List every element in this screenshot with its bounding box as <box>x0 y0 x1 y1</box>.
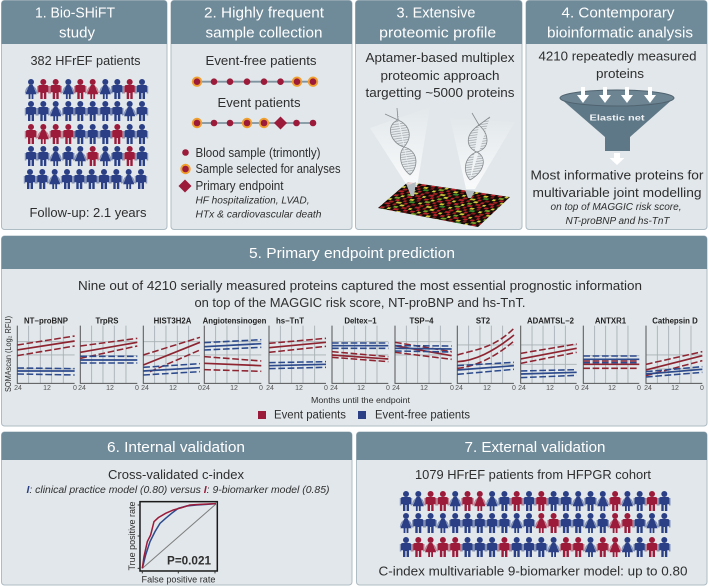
chart: Deltex-1: 0 <box>386 385 390 392</box>
panel: 3. Extensive proteomic profile <box>356 0 522 230</box>
panel 4 heading <box>547 4 693 42</box>
panel 3 heading: 3. Extensive <box>396 4 476 22</box>
icon: DNA helix 1 <box>385 108 416 175</box>
aptamer description: proteomic approach <box>380 69 500 83</box>
panel 1 heading: study <box>59 24 95 42</box>
panel 7 header band <box>356 432 707 460</box>
event label: Event patients <box>218 96 300 110</box>
chart: NT-proBNP: 0 <box>73 385 77 392</box>
chart: Cathepsin D: 0 <box>700 385 704 392</box>
model comparison: I: clinical practice model (0.80) versus I: 9-biomarker model (0.85) <box>26 485 330 496</box>
panel: 5. Primary endpoint prediction <box>2 236 707 426</box>
note on models <box>550 202 682 227</box>
panel 7 background <box>356 432 707 585</box>
chart: TrpRS: TrpRS <box>96 316 118 326</box>
chart: Cathepsin D: 24 <box>644 385 652 392</box>
chart: ADAMTSL-2: 0 <box>575 385 579 392</box>
c-index result: C-index multivariable 9-biomarker model: up to 0.80 <box>378 564 688 578</box>
panel 5 background <box>2 236 707 426</box>
panel 7 heading: 7. External validation <box>464 439 606 456</box>
output description: multivariable joint modelling <box>532 186 702 200</box>
protein count: 4210 repeatedly measured <box>538 50 697 64</box>
output description: Most informative proteins for <box>530 168 704 182</box>
panel 1 heading <box>35 4 115 42</box>
chart: ADAMTSL-2 <box>518 316 579 392</box>
light beams <box>370 107 515 189</box>
event-free timeline <box>192 76 318 87</box>
panel 2 header band <box>171 0 352 44</box>
chart: TSP-4: 24 <box>392 385 400 392</box>
legend: HF hospitalization, LVAD, <box>196 196 310 206</box>
probes <box>407 182 475 198</box>
chart: TrpRS <box>78 316 139 392</box>
panel: 7. External validation <box>356 432 707 585</box>
panel 6 heading: 6. Internal validation <box>107 439 245 456</box>
label: Elastic net: Elastic net <box>590 114 645 122</box>
panel 1 background <box>2 0 167 230</box>
panel: 2. Highly frequent sample collection <box>171 0 352 230</box>
panel: 6. Internal validation <box>2 432 352 585</box>
chart: hs-TnT <box>266 316 328 392</box>
chart: TSP-4: TSP−4 <box>409 316 434 326</box>
panel: 1. Bio-SHiFT study <box>2 0 167 230</box>
x axis title: Months until the endpoint <box>311 396 411 405</box>
chart: NT-proBNP <box>14 316 77 392</box>
legend: event patients: Event patients <box>274 410 346 422</box>
chart: ANTXR1: 0 <box>637 385 641 392</box>
legend: HTx & cardiovascular death <box>196 210 322 220</box>
chart: Angiotensinogen: 24 <box>202 385 210 392</box>
chart: Cathepsin D: Cathepsin D <box>652 316 698 326</box>
chart: Angiotensinogen: 12 <box>230 385 238 392</box>
chart: NT-proBNP: 12 <box>43 385 51 392</box>
output description <box>530 168 704 200</box>
panel 6 background <box>2 432 352 585</box>
chart: HIST3H2A: 0 <box>198 385 202 392</box>
summary text: on top of the MAGGIC risk score, NT-proBNP and hs-TnT. <box>194 296 526 310</box>
arrow out of funnel <box>610 153 624 165</box>
chart: Deltex-1 <box>330 316 390 392</box>
chart: NT-proBNP: 24 <box>14 385 22 392</box>
aptamer description <box>366 51 515 100</box>
legend: Blood sample (trimontly) <box>196 146 320 160</box>
chart: hs-TnT: 12 <box>295 385 303 392</box>
chart: ST2 <box>455 316 516 392</box>
c-index title: Cross-validated c-index <box>108 468 245 482</box>
chart: ST2: 24 <box>455 385 463 392</box>
panel 2 heading <box>204 4 325 42</box>
chart: Angiotensinogen: Angiotensinogen <box>203 316 267 326</box>
panel 4 heading: 4. Contemporary <box>562 4 675 22</box>
panel 1 heading: 1. Bio-SHiFT <box>35 4 115 22</box>
chart: Deltex-1: 12 <box>357 385 365 392</box>
chart: Deltex-1: 24 <box>330 385 338 392</box>
chart: ANTXR1: 24 <box>581 385 589 392</box>
event-free label: Event-free patients <box>206 54 316 68</box>
panel 5 header band <box>2 236 707 269</box>
note on models: on top of MAGGIC risk score, <box>550 202 682 213</box>
icon: DNA helix 2 <box>465 113 490 180</box>
chart: ANTXR1: 12 <box>608 385 616 392</box>
chart: HIST3H2A: 24 <box>141 385 149 392</box>
x axis label: False positive rate <box>142 574 216 584</box>
panel 2 heading: 2. Highly frequent <box>204 4 325 22</box>
panel 5 heading: 5. Primary endpoint prediction <box>249 245 455 262</box>
summary text <box>78 279 642 310</box>
chart: ADAMTSL-2: ADAMTSL−2 <box>527 316 575 326</box>
legend <box>178 146 340 220</box>
chart: ANTXR1 <box>581 316 641 392</box>
chart: Angiotensinogen: 0 <box>259 385 263 392</box>
legend: Primary endpoint <box>196 179 284 193</box>
protein count <box>538 50 697 81</box>
chart: ADAMTSL-2: 12 <box>546 385 554 392</box>
microarray chip <box>378 182 510 227</box>
panel 4 header band <box>526 0 707 44</box>
chart: TSP-4 <box>392 316 454 392</box>
chart: hs-TnT: 0 <box>324 385 328 392</box>
chart: NT-proBNP: NT−proBNP <box>24 316 68 326</box>
chart: HIST3H2A <box>141 316 202 392</box>
panel 4 background <box>526 0 707 230</box>
chart: hs-TnT: 24 <box>266 385 274 392</box>
patient count: 382 HFrEF patients <box>30 54 140 68</box>
y axis title: SOMAscan (Log₂ RFU) <box>4 316 13 392</box>
panel 3 background <box>356 0 522 230</box>
chart: hs-TnT: hs−TnT <box>276 316 304 326</box>
panel 3 heading <box>379 4 496 42</box>
follow-up text: Follow-up: 2.1 years <box>30 206 146 220</box>
ROC chart <box>127 502 217 584</box>
chart: TrpRS: 24 <box>78 385 86 392</box>
cohort text: 1079 HFrEF patients from HFPGR cohort <box>415 468 652 482</box>
panel 6 header band <box>2 432 352 460</box>
note on models: NT-proBNP and hs-TnT <box>566 216 670 227</box>
protein count: proteins <box>596 67 644 81</box>
pictogram: 1079 patients <box>400 491 670 557</box>
icon: funnel <box>560 90 674 151</box>
legend: event-free patients: Event-free patients <box>375 410 470 422</box>
panel 2 heading: sample collection <box>206 24 322 42</box>
summary text: Nine out of 4210 serially measured proteins captured the most essential prognostic information <box>78 279 642 293</box>
event timeline <box>192 116 316 130</box>
chart: Cathepsin D: 12 <box>671 385 679 392</box>
panel 3 heading: proteomic profile <box>379 24 496 42</box>
panel 4 heading: bioinformatic analysis <box>547 24 693 42</box>
chart: ST2: ST2 <box>476 316 491 326</box>
panel 3 header band <box>356 0 522 44</box>
chart: TrpRS: 12 <box>106 385 114 392</box>
y axis label: True positive rate <box>127 502 137 570</box>
chart: ST2: 0 <box>512 385 516 392</box>
legend: Sample selected for analyses <box>196 162 340 176</box>
chart: HIST3H2A: HIST3H2A <box>154 316 192 326</box>
panel 2 background <box>171 0 352 230</box>
aptamer description: targetting ~5000 proteins <box>366 86 514 100</box>
chart: HIST3H2A: 12 <box>169 385 177 392</box>
chart: Deltex-1: Deltex−1 <box>344 316 377 326</box>
panel: 4. Contemporary bioinformatic analysis <box>526 0 707 230</box>
chart: TSP-4: 12 <box>420 385 428 392</box>
arrows into funnel <box>577 87 656 103</box>
chart: ST2: 12 <box>483 385 491 392</box>
panel 1 header band <box>2 0 167 44</box>
pictogram: 382 patients <box>24 79 148 189</box>
chart: Cathepsin D <box>644 316 704 392</box>
chart: Angiotensinogen <box>202 316 267 392</box>
chart: TrpRS: 0 <box>135 385 139 392</box>
p value: P=0.021 <box>167 556 212 568</box>
chart: TSP-4: 0 <box>450 385 454 392</box>
chart: ANTXR1: ANTXR1 <box>595 316 627 326</box>
chart: ADAMTSL-2: 24 <box>518 385 526 392</box>
aptamer description: Aptamer-based multiplex <box>366 51 515 65</box>
